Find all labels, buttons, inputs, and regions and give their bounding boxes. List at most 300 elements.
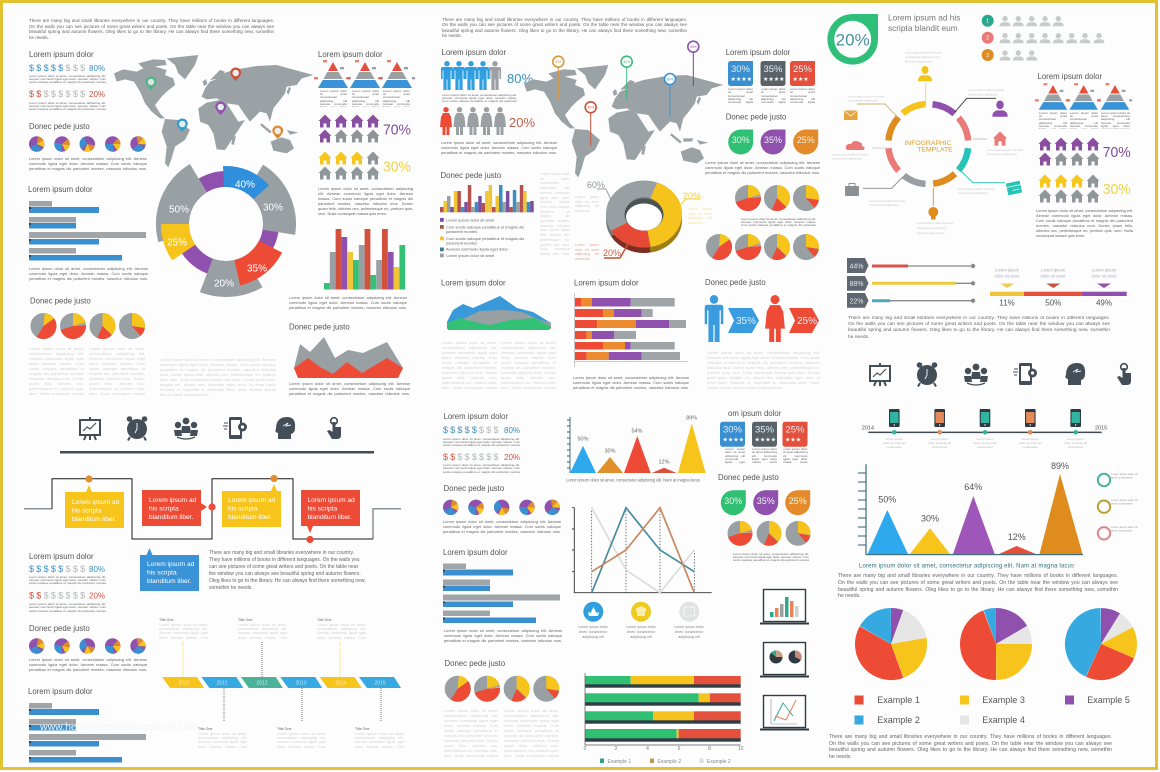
chart legend: parturient montes xyxy=(446,240,477,246)
light text columns xyxy=(442,340,556,390)
dollar rating 20 percent: $$$$$$$$ xyxy=(29,590,87,600)
drop badges xyxy=(721,490,810,515)
flow box red: Lorem ipsum ad xyxy=(149,497,197,504)
3D donut chart xyxy=(575,180,712,260)
panel: middle column top xyxy=(440,16,687,258)
triangle values: 30% xyxy=(604,448,616,454)
dollar rating 20 percent: 20% xyxy=(89,90,105,99)
light notes around ring: consectetur adipiscing elit xyxy=(905,55,940,59)
flow box yellow: his scripta xyxy=(228,506,258,512)
phone notes: dolor sit amet elit xyxy=(1019,441,1042,445)
circular infographic template xyxy=(832,50,1023,235)
phone notes: Lorem ipsum xyxy=(931,437,949,441)
heading: Lorem ipsum dolor xyxy=(442,48,506,57)
triangle values: 30% xyxy=(921,514,939,524)
light notes around ring: Lorem ipsum dolor sit amet xyxy=(968,88,1004,92)
world map with stem pins xyxy=(524,41,723,177)
flow box yellow: blanditum liber. xyxy=(228,514,273,521)
bar chart xyxy=(29,703,146,762)
timeline year labels: 2010 xyxy=(178,680,190,686)
icon captions: Lorem ipsum dolor xyxy=(626,625,657,629)
ring segments xyxy=(872,88,985,200)
star badges: ★★★★ xyxy=(730,76,752,83)
numbered people pictogram xyxy=(982,15,1104,61)
timeline notes: Title One xyxy=(159,618,173,622)
intro text: he needs. xyxy=(442,33,462,38)
large triangle chart: Lorem ipsum dolor sit xyxy=(1111,498,1138,502)
intro text: beautiful spring and autumn flowers. Oleg likes to go to the library. He can always find there something new, somethin xyxy=(29,29,274,34)
pyramid captions xyxy=(1039,112,1130,128)
donut value labels xyxy=(167,180,283,290)
light notes around ring: Nam at magna lacus xyxy=(917,231,945,235)
timeline notes: Title One xyxy=(355,727,369,731)
phone notes: consectetur xyxy=(977,445,993,449)
heading: Donec pede justo xyxy=(29,122,90,131)
phone notes: Lorem ipsum xyxy=(1022,437,1039,441)
light notes around ring: consectetur adipiscing xyxy=(987,152,1017,156)
heading: Donec pede justo xyxy=(30,296,91,306)
line chart xyxy=(572,508,712,593)
flow box blue xyxy=(140,548,199,591)
world map with stem pins: 30% xyxy=(666,77,674,81)
example stacked bars xyxy=(584,673,744,765)
heading: Donec pede justo xyxy=(444,484,505,493)
triangle values xyxy=(878,461,1069,542)
row of small pies xyxy=(31,136,145,152)
star badges xyxy=(720,422,808,447)
paragraph beside flow: There are many big and small libraries everywhere in our country. xyxy=(209,550,354,556)
large triangle chart xyxy=(858,461,1138,569)
intro text xyxy=(442,16,687,40)
centre title: INFOGRAPHIC xyxy=(904,140,952,147)
chart legend xyxy=(440,218,524,258)
connector lines xyxy=(857,83,1005,206)
heading: Donec pede justo xyxy=(440,171,502,180)
light notes around ring: Nam at magna lacus xyxy=(905,60,933,64)
heading: Lorem ipsum dolor xyxy=(1038,72,1102,81)
paragraph: On the walls you can see pictures of some great writers and poets. On the table near the window you can always see xyxy=(829,741,1112,747)
world map with stem pins: 30% xyxy=(555,60,562,64)
progress bars with tags: 44% xyxy=(850,264,864,270)
phone notes xyxy=(883,437,1087,449)
flow box blue: his scripta xyxy=(147,570,177,576)
bar chart xyxy=(443,564,560,623)
icon captions: adipiscing elit xyxy=(630,635,652,639)
axis numbers: 10 xyxy=(738,746,744,752)
icon captions xyxy=(578,625,705,639)
flow box yellow: Lorem ipsum ad xyxy=(72,499,120,506)
star badges: 30% xyxy=(723,425,743,436)
segment values: 49% xyxy=(1096,298,1112,308)
paragraph: On the walls you can see pictures of some great writers and poets. On the table near the window you can always see xyxy=(838,580,1118,586)
year labels: 2014 xyxy=(862,426,874,432)
heading: Donec pede justo xyxy=(705,278,766,287)
house percent labels: 70% xyxy=(1103,144,1131,161)
phone notes: dolor sit amet elit xyxy=(1064,441,1087,445)
flow box blue: Lorem ipsum ad xyxy=(147,561,195,568)
phone notes: consectetur xyxy=(1068,445,1083,449)
large triangle chart: amet consectetur xyxy=(1111,502,1133,506)
20 percent drop badge: 20% xyxy=(836,30,870,49)
step flow diagram xyxy=(24,475,401,591)
house percent labels xyxy=(1103,144,1131,198)
paragraph: On the walls you can see pictures of some great writers and poets. On the table near the window you can always see xyxy=(848,322,1110,327)
paragraph beside flow: Oleg likes to go to the library. He can always find there something new, xyxy=(209,578,366,584)
star badges: ★★★★ xyxy=(754,436,776,444)
intro text: On the walls you can see pictures of some great writers and poets. On the table near the window you can always see xyxy=(442,22,687,27)
world map with pins xyxy=(114,55,313,167)
badge captions xyxy=(728,88,815,105)
light notes around ring: consectetur adipiscing xyxy=(832,156,862,160)
heading: Lorem ipsum dolor xyxy=(574,278,639,288)
heading: Lorem ipsum dolor xyxy=(318,50,383,59)
axis numbers: 2 xyxy=(615,746,618,752)
triangle values: 89% xyxy=(686,416,697,422)
axis numbers: 4 xyxy=(646,746,649,752)
house percent labels xyxy=(383,122,411,176)
world map with stem pins: 30% xyxy=(587,106,594,110)
star badges: ★★★ xyxy=(792,76,809,83)
panel: middle row xyxy=(441,278,820,390)
triangle values: 89% xyxy=(1051,461,1069,471)
light notes around ring: Lorem ipsum dolor sit amet xyxy=(848,94,884,98)
segment values xyxy=(999,298,1112,308)
light text columns xyxy=(29,346,145,396)
light notes around ring: consectetur adipiscing xyxy=(958,191,988,195)
star badges: 25% xyxy=(785,425,805,436)
panel: middle column bottom left xyxy=(443,412,562,758)
flow box yellow xyxy=(222,484,281,527)
house percent labels: 70% xyxy=(383,122,411,138)
timeline notes xyxy=(159,618,369,731)
pie legend: Example 4 xyxy=(982,715,1025,725)
man and woman share: 35% xyxy=(736,316,756,327)
light notes around ring: consectetur adipiscing xyxy=(869,203,899,207)
year labels: 2015 xyxy=(1095,426,1107,432)
icon: house xyxy=(993,131,1007,146)
drop badges: 25% xyxy=(789,496,807,506)
segmented percent bar xyxy=(990,268,1127,308)
pie legend: Example 2 xyxy=(877,715,920,725)
pyramids xyxy=(314,60,415,88)
phone notes: Lorem ipsum xyxy=(1067,437,1085,441)
legend: Example 1 xyxy=(608,759,631,765)
donut labels xyxy=(587,180,701,258)
timeline year labels: 2014 xyxy=(335,680,347,686)
pie row two xyxy=(710,238,814,256)
heading: Donec pede justo xyxy=(444,659,506,668)
dollar rating 20 percent: 20% xyxy=(89,592,105,600)
phone notes: dolor sit amet elit xyxy=(883,441,906,445)
laptop with bar chart xyxy=(760,590,809,624)
3D donut chart: Lorem ipsum dolor sit amet adipiscing elit commodo xyxy=(575,195,599,213)
segment notes: dolor sit amet xyxy=(1091,274,1117,278)
small triangle chart xyxy=(566,416,706,482)
light notes around ring: consectetur adipiscing xyxy=(917,226,947,230)
flow box red: blanditum liber. xyxy=(149,514,194,521)
dollar rating 20 percent: $$$$$$$$ xyxy=(29,89,87,99)
paragraph beside flow: the window you can always see beautiful spring and autumn flowers. xyxy=(209,571,361,577)
paragraph: There are many big and small libraries everywhere in our country. They have millions of books in different languages. xyxy=(829,734,1112,740)
area chart xyxy=(294,337,403,378)
intro text xyxy=(29,18,274,42)
light notes around ring: Lorem ipsum dolor sit amet xyxy=(917,221,953,225)
paragraph: There are many big and small libraries everywhere in our country. They have millions of books in different languages. xyxy=(838,573,1118,579)
panel: badges bottom middle xyxy=(718,409,810,562)
chart caption: Lorem ipsum dolor sit amet, consectetur adipiscing elit. Nam at magna lacus xyxy=(859,563,1074,569)
stacked bar chart xyxy=(574,293,688,367)
dollar rating 80 percent: 80% xyxy=(504,426,520,435)
20 percent drop badge xyxy=(827,14,878,65)
icon captions: Lorem ipsum dolor xyxy=(674,625,705,629)
icon: briefcase xyxy=(845,184,859,196)
timeline notes: Title One xyxy=(198,727,212,731)
pie legend: Example 1 xyxy=(877,695,920,705)
paragraph: Lorem ipsum dolor sit amet, consectetuer adipiscing elit. Aenean commodo ligula eget dolor. Aenean massa. Cum sociis natoque penatibus et magnis dis parturient montes, nascetur ridiculus mus. Donec quam felis, ultricies nec, pellentesque eu, pretium quis, sem. Nulla consequat massa quis enim. xyxy=(1036,208,1133,238)
flow box yellow xyxy=(65,485,124,528)
axis numbers: 0 xyxy=(584,746,587,752)
dollar rating 80 percent: $$$$$$$$ xyxy=(29,63,87,73)
drop badges xyxy=(728,130,818,154)
triangle values: 12% xyxy=(1008,532,1026,542)
laptop with line chart xyxy=(760,696,809,730)
triangle values: 50% xyxy=(577,436,589,442)
large triangle chart: amet consectetur xyxy=(1111,528,1133,532)
timeline year labels: 2012 xyxy=(256,680,268,686)
segment notes: Lorem ipsum xyxy=(1092,268,1117,272)
light notes around ring: Lorem ipsum dolor sit amet xyxy=(958,187,994,191)
segment values: 50% xyxy=(1045,298,1061,308)
icon: light bulb xyxy=(928,207,938,220)
triangle caption: Lorem ipsum dolor sit amet, consectetur adipiscing elit. Nam at magna lacus xyxy=(566,478,700,482)
drop badges: 35% xyxy=(757,496,775,506)
progress bars with tags: 22% xyxy=(850,298,864,306)
flow box red: his scripta xyxy=(308,506,338,512)
world map with stem pins: 30% xyxy=(690,45,697,49)
panel: right column pictograms xyxy=(1035,72,1133,238)
light notes around ring: Lorem ipsum dolor sit amet xyxy=(869,199,905,203)
large triangle chart: Lorem ipsum dolor sit xyxy=(1111,525,1138,529)
donut value labels: 30% xyxy=(263,202,283,214)
panel: left column right side xyxy=(289,50,415,396)
chart legend: Cum sociis natoque penatibus et magnis dis xyxy=(446,236,524,241)
numbered people pictogram: 2 xyxy=(986,36,989,42)
chart legend: Cum sociis natoque penatibus et magnis dis xyxy=(446,224,524,230)
progress bars with tags xyxy=(847,258,975,308)
house pictograms xyxy=(318,114,380,180)
paragraph: he needs. xyxy=(829,754,852,760)
timeline year labels: 2015 xyxy=(374,680,386,686)
panel: badges and pies top middle xyxy=(705,48,820,256)
badge captions xyxy=(725,448,808,465)
title text top right: Lorem ipsum ad his xyxy=(888,12,960,22)
paragraph xyxy=(829,734,1112,762)
heading: om ipsum dolor xyxy=(728,409,782,418)
star badges: ★★★ xyxy=(785,436,801,444)
star badges xyxy=(728,61,815,86)
man and woman share: 25% xyxy=(797,316,817,327)
four pie charts xyxy=(34,317,140,335)
paragraph: Lorem ipsum dolor sit amet, consectetuer adipiscing elit. Aenean commodo ligula eget dolor. Aenean massa. Cum sociis natoque penatibus et magnis dis parturient montes, nascetur ridiculus mus. Donec quam felis, ultricies nec, pellentesque eu, pretium quis, sem. Nulla consequat massa quis enim. xyxy=(318,186,413,216)
segment notes: Lorem ipsum xyxy=(1041,268,1066,272)
dollar rating 80 percent: 80% xyxy=(89,565,105,574)
phone notes: consectetur xyxy=(887,445,902,449)
light notes around ring: Lorem ipsum dolor sit amet xyxy=(987,148,1023,152)
paragraph beside flow: somethin he needs. xyxy=(209,585,253,591)
panel: left column bottom xyxy=(28,552,198,762)
triangle values: 64% xyxy=(964,482,982,492)
heading: Donec pede justo xyxy=(29,624,90,633)
icon row right xyxy=(870,362,1131,386)
heading: Lorem ipsum dolor xyxy=(28,687,93,696)
icon: user yellow xyxy=(918,66,932,81)
intro text: On the walls you can see pictures of some great writers and poets. On the table near the window you can always see xyxy=(29,24,274,29)
numbered people pictogram: 1 xyxy=(986,19,989,25)
heading: Lorem ipsum dolor xyxy=(441,278,506,288)
light notes around ring: Lorem ipsum dolor sit amet xyxy=(832,152,868,156)
female pictograms xyxy=(440,107,506,135)
star badges: 35% xyxy=(755,425,775,436)
centre title: TEMPLATE xyxy=(917,146,953,154)
world map with stem pins: 30% xyxy=(623,60,630,64)
male pictograms xyxy=(441,61,501,90)
light text: Lorem ipsum dolor sit amet, consectetuer adipiscing elit. Aenean commodo ligula eget dolor. Aenean massa. Cum sociis natoque penatibus et magnis dis parturient montes, nascetur ridiculus mus. Donec quam felis, ultricies nec, pellentesque eu, pretium quis, sem. Nulla consequat massa quis enim. Donec pede justo, fringilla vel, aliquet nec, vulputate eget, arcu. In enim justo, rhoncus ut, imperdiet a, venenatis vitae, justo. Nullam dictum felis eu pede mollis pretium. xyxy=(707,350,820,390)
phone notes: consectetur xyxy=(1023,445,1038,449)
pyramid captions xyxy=(320,90,410,106)
flow box yellow: Lorem ipsum ad xyxy=(228,497,276,504)
axis numbers: 6 xyxy=(678,746,681,752)
timeline notes: Title One xyxy=(317,618,331,622)
flow box yellow: his scripta xyxy=(72,508,102,514)
timeline notes: Title One xyxy=(238,618,252,622)
three circle icons xyxy=(578,602,705,639)
20 percent label: 20% xyxy=(509,115,535,130)
flow box blue: blanditum liber. xyxy=(147,578,192,585)
dollar rating 80 percent: $$$$$$$$ xyxy=(443,425,501,435)
triangle values: 54% xyxy=(631,428,643,434)
flow box red: Lorem ipsum ad xyxy=(308,497,355,504)
pie row one xyxy=(741,189,814,207)
80 percent label: 80% xyxy=(507,71,533,86)
horizontal bar chart xyxy=(29,201,146,260)
heading: Donec pede justo xyxy=(726,112,787,122)
phone notes: consectetur xyxy=(932,445,947,449)
light notes around ring: Lorem ipsum dolor sit amet xyxy=(905,50,941,54)
donut labels: 60% xyxy=(587,180,605,190)
axis numbers xyxy=(584,746,744,752)
heading: Lorem ipsum dolor xyxy=(28,185,93,194)
heading: Lorem ipsum dolor xyxy=(443,548,508,557)
icon: user purple xyxy=(992,100,1008,117)
phone notes: dolor sit amet elit xyxy=(974,441,996,445)
dollar rating 20 percent: $$$$$$$$ xyxy=(443,452,501,462)
pie row xyxy=(733,524,805,542)
icon captions: adipiscing elit xyxy=(582,635,604,639)
heading: Lorem ipsum dolor xyxy=(29,552,94,561)
star badges: 30% xyxy=(731,64,751,75)
triangle values: 12% xyxy=(658,460,670,466)
timeline year labels: 2011 xyxy=(217,680,228,686)
laptop with pies xyxy=(760,642,809,678)
chart legend: Lorem ipsum dolor sit amet xyxy=(446,253,495,258)
flow box red xyxy=(301,490,360,533)
light text columns xyxy=(444,708,559,758)
star badges: ★★★★ xyxy=(763,76,785,83)
dollar rating 20 percent: 20% xyxy=(504,453,520,462)
house pictograms xyxy=(1038,138,1100,202)
panel: left column top xyxy=(28,18,274,396)
numbered people pictogram: 3 xyxy=(986,53,989,59)
heading: Donec pede justo xyxy=(289,322,350,332)
icon: cloud xyxy=(846,141,865,150)
paragraph beside flow xyxy=(209,550,389,594)
drop badges: 30% xyxy=(732,135,750,145)
heading: Donec pede justo xyxy=(718,473,779,482)
paragraph: he needs. xyxy=(838,593,861,599)
star badges: 25% xyxy=(793,64,813,75)
triangle values: 50% xyxy=(878,494,896,504)
chart legend: parturient montes xyxy=(446,229,477,234)
large triangle chart: Lorem ipsum dolor sit xyxy=(1111,472,1138,476)
segment notes xyxy=(994,268,1117,278)
paragraph: beautiful spring and autumn flowers. Oleg likes to go to the library. He can always find there something new, somethin xyxy=(848,328,1110,333)
icon captions: adipiscing elit xyxy=(678,635,700,639)
paragraph: There are many big and small libraries everywhere in our country. They have millions of books in different languages. xyxy=(848,316,1110,321)
watermark: www.heritagechristiancollege.com xyxy=(39,721,198,733)
donut value labels: 35% xyxy=(247,264,267,274)
flow box yellow: blanditum liber. xyxy=(72,516,117,523)
heading: Lorem ipsum dolor xyxy=(444,412,508,421)
phone notes: dolor sit amet elit xyxy=(928,441,951,445)
four pies xyxy=(449,680,554,698)
legend: Example 2 xyxy=(707,759,731,765)
light notes around ring: consectetur adipiscing xyxy=(968,92,998,96)
ribbon timeline xyxy=(159,618,404,749)
small pies xyxy=(31,638,145,654)
donut value labels: 50% xyxy=(169,204,189,216)
pie legend xyxy=(854,695,1130,725)
man and woman share xyxy=(705,295,819,342)
year labels xyxy=(862,426,1107,432)
intro text: There are many big and small libraries everywhere in our country. They have millions of books in different languages. xyxy=(29,18,274,23)
light notes around ring: consectetur adipiscing xyxy=(848,98,878,102)
pyramids xyxy=(1035,83,1132,110)
chart legend: Lorem ipsum dolor sit amet xyxy=(446,218,495,222)
icon: envelope xyxy=(844,110,858,120)
segment notes: dolor sit amet xyxy=(994,274,1020,278)
segment notes: dolor sit amet xyxy=(1040,274,1066,278)
axis numbers: 8 xyxy=(708,746,711,752)
intro text: he needs. xyxy=(29,35,49,40)
small pies xyxy=(445,500,559,515)
house percent labels: 30% xyxy=(383,158,411,176)
timeline year labels: 2013 xyxy=(295,680,307,686)
icon: card xyxy=(1006,181,1022,195)
icon captions: amet, consectetur xyxy=(627,630,656,634)
icon captions: amet, consectetur xyxy=(675,630,704,634)
intro text: beautiful spring and autumn flowers. Oleg likes to go to the library. He can always find there something new, somethin xyxy=(442,28,687,32)
dollar rating 80 percent: 80% xyxy=(89,64,105,73)
layered area chart xyxy=(447,296,551,330)
grouped column chart xyxy=(324,229,405,290)
drop badges: 25% xyxy=(797,135,815,145)
chart legend: Aenean commodo ligula eget dolor xyxy=(446,246,508,252)
icon row left xyxy=(80,416,341,440)
donut labels: 20% xyxy=(603,248,621,258)
donut labels: 20% xyxy=(683,191,701,201)
light notes around ring xyxy=(832,50,1023,235)
flow box red xyxy=(142,490,207,526)
